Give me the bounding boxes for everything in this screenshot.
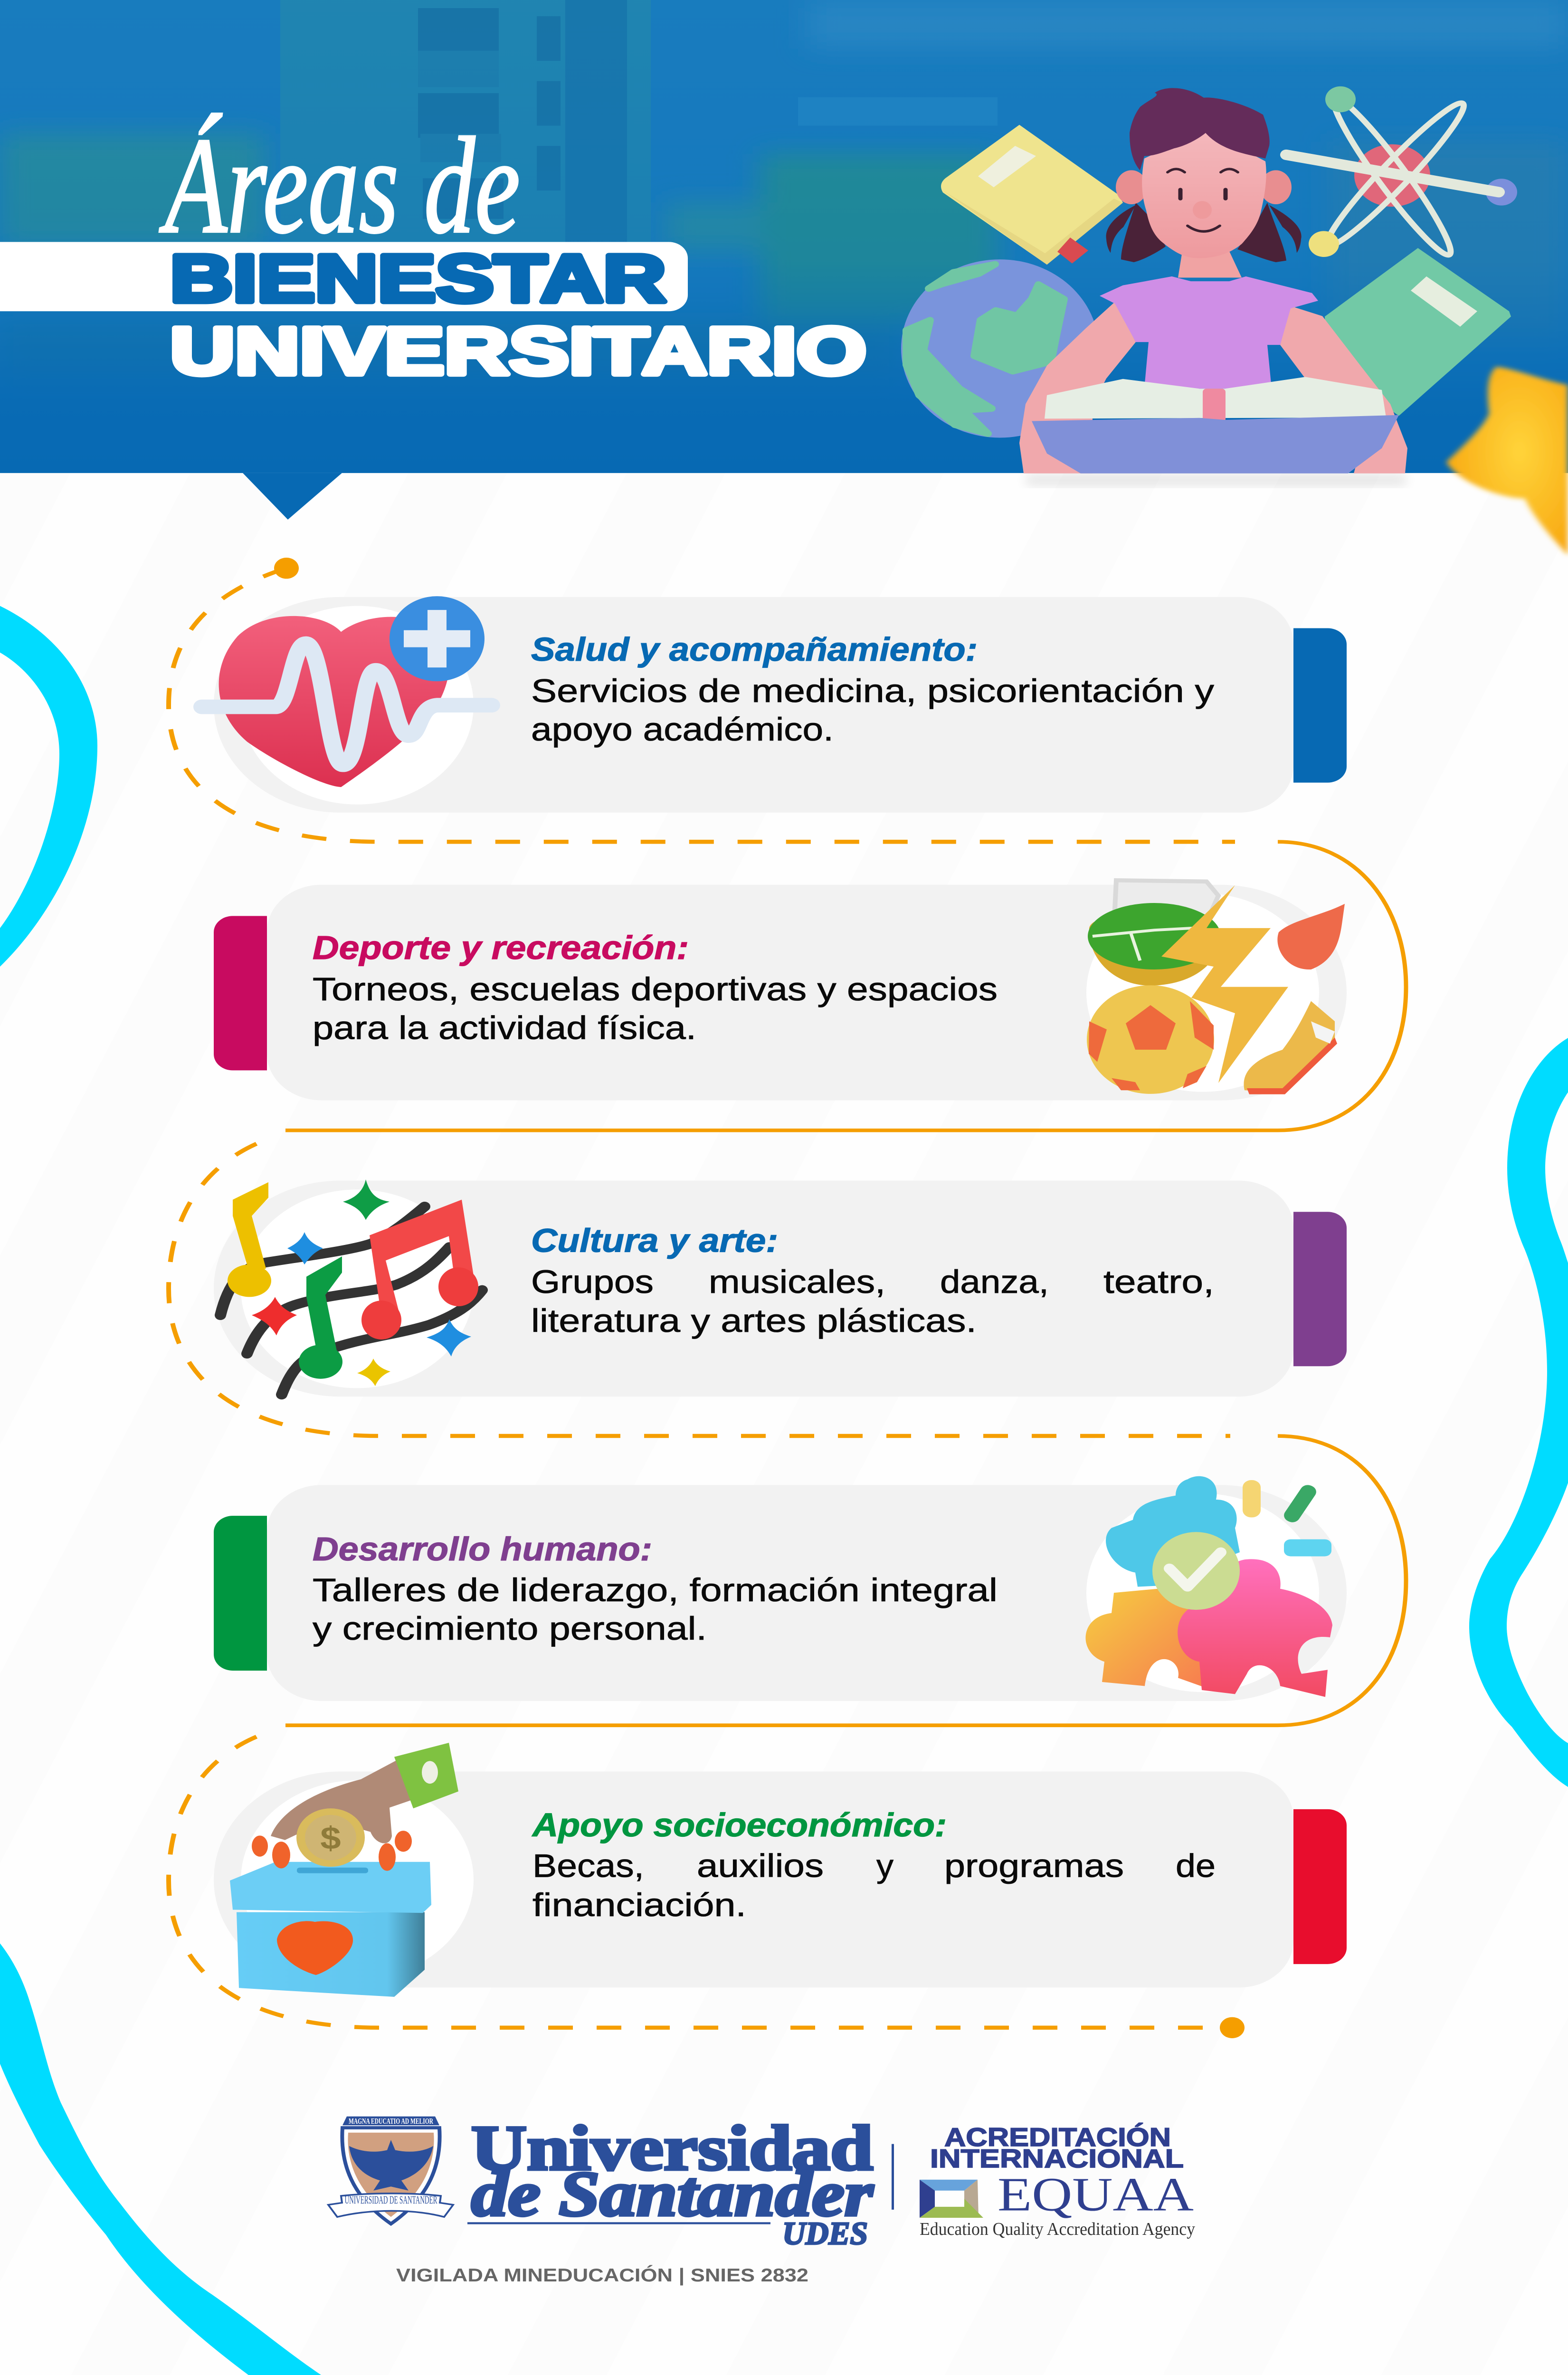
green book (1325, 248, 1511, 416)
panel: cultura (214, 1179, 1347, 1396)
icon: blurred star (1446, 367, 1568, 555)
title: UNIVERSITARIO: UNIVERSITARIO (170, 314, 866, 389)
shield: MAGNA EDUCATIO AD MELIOR (349, 2117, 433, 2126)
icon: donation box with coin (230, 1743, 458, 1997)
text: desarrollo: y crecimiento personal. (313, 1611, 707, 1647)
hair top (1130, 88, 1270, 170)
text: cultura: danza, (940, 1264, 1049, 1300)
header pointer triangle (243, 473, 342, 520)
icon: donation box with coin: $ (320, 1821, 341, 1856)
icon: sports set (1087, 880, 1345, 1094)
logo: acreditación EQUAA: EQUAA (998, 2168, 1194, 2221)
hair back (1106, 203, 1302, 262)
text: deporte: para la actividad física. (313, 1010, 696, 1046)
logo: Universidad de Santander (328, 2112, 874, 2252)
connector: dashed path three (169, 1737, 1221, 2028)
face features (1168, 169, 1238, 231)
connector: dashed path two (169, 1144, 1230, 1436)
header banner (0, 0, 1568, 473)
icon: puzzle pieces (1085, 1476, 1332, 1697)
open book cover (1032, 415, 1399, 474)
panel: desarrollo (214, 1476, 1347, 1701)
text: desarrollo: Talleres de liderazgo, formación integral (313, 1572, 998, 1608)
illustration: student with books, globe and atom (901, 86, 1517, 487)
dot: path start (274, 558, 299, 579)
divider (892, 2144, 894, 2210)
atom (1286, 86, 1517, 261)
icon: heart with pulse and plus (202, 596, 492, 787)
panel: salud (202, 596, 1347, 813)
text: apoyo: de (1176, 1848, 1216, 1884)
heading: apoyo: Apoyo socioeconómico: (532, 1807, 947, 1844)
logo: acreditación EQUAA (920, 2122, 1195, 2239)
text: deporte: Torneos, escuelas deportivas y espacios (313, 971, 998, 1007)
arms (1019, 302, 1136, 474)
text: apoyo: auxilios (697, 1848, 824, 1884)
footer note: VIGILADA MINEDUCACIÓN | SNIES 2832 (396, 2264, 808, 2286)
book pages (1045, 377, 1386, 418)
cyan wave: left top (0, 606, 97, 967)
connector: solid curve one (285, 842, 1406, 1130)
text: salud: apoyo académico. (531, 711, 834, 748)
globe (901, 259, 1099, 438)
connector: dashed path one (169, 568, 1235, 842)
logo: acreditación EQUAA: INTERNACIONAL (930, 2144, 1184, 2173)
text: cultura: musicales, (709, 1264, 885, 1300)
text: cultura: literatura y artes plásticas. (531, 1302, 977, 1339)
text: salud: Servicios de medicina, psicorientación y (531, 673, 1215, 709)
text: cultura: teatro, (1103, 1264, 1214, 1300)
connector: solid curve two (285, 1436, 1406, 1725)
heading: deporte: Deporte y recreación: (313, 929, 689, 966)
header photo: tower (280, 0, 998, 243)
face (1142, 130, 1266, 258)
neck (1178, 251, 1242, 277)
title bar: BIENESTAR: BIENESTAR (170, 241, 666, 316)
text: apoyo: programas (944, 1848, 1124, 1884)
text: apoyo: y (876, 1848, 894, 1884)
icon: music notes (220, 1179, 482, 1395)
title: Áreas de: Áreas de (159, 109, 520, 262)
logo: acreditación EQUAA: ACREDITACIÓN (944, 2122, 1171, 2152)
wordmark: Universidad (471, 2112, 873, 2184)
ears (1116, 170, 1147, 204)
panel: deporte (214, 880, 1347, 1101)
dot: path end (1220, 2017, 1245, 2038)
shield: UNIVERSIDAD DE SANTANDER (345, 2194, 437, 2206)
yellow book (941, 125, 1123, 265)
shadow below figure (1026, 473, 1406, 487)
panel: apoyo (214, 1743, 1347, 1997)
heading: cultura: Cultura y arte: (531, 1222, 778, 1259)
shield (328, 2117, 453, 2224)
text: apoyo: financiación. (532, 1887, 746, 1923)
heading: desarrollo: Desarrollo humano: (313, 1531, 652, 1568)
header photo: trees (0, 0, 1568, 385)
logo: Universidad de Santander: de Santander (471, 2158, 874, 2229)
logo: Universidad de Santander: UDES (782, 2216, 868, 2252)
title bar: BIENESTAR (0, 241, 688, 316)
text: cultura: Grupos (531, 1264, 654, 1300)
cyan wave: bottom left (0, 1943, 321, 2375)
equaa emblem (920, 2180, 983, 2218)
cyan wave: right (1469, 1038, 1568, 1787)
shirt (1100, 276, 1318, 389)
text: apoyo: Becas, (532, 1848, 644, 1884)
logo: acreditación EQUAA: Education Quality Accreditation Agency (920, 2219, 1195, 2239)
heading: salud: Salud y acompañamiento: (531, 631, 978, 668)
